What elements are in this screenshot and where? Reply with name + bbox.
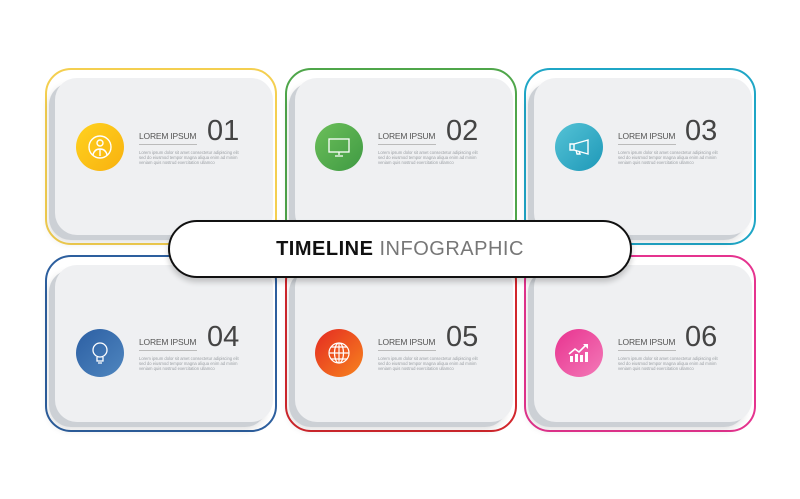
number 06: 06 (685, 321, 717, 353)
text 05: Lorem ipsum dolor sit amet consectetur adipiscing elit sed do eiusmod tempor magna aliqua enim ad minim veniam quis nostrud exercitation ullamco (378, 356, 478, 371)
panel: 03 outline (524, 68, 756, 245)
text 03: Lorem ipsum dolor sit amet consectetur adipiscing elit sed do eiusmod tempor magna aliqua enim ad minim veniam quis nostrud exercitation ullamco (618, 150, 718, 165)
number 03: 03 (685, 115, 717, 147)
heading 05: LOREM IPSUM (378, 337, 435, 347)
panel: 04 card (55, 265, 273, 422)
text 06: Lorem ipsum dolor sit amet consectetur adipiscing elit sed do eiusmod tempor magna aliqua enim ad minim veniam quis nostrud exercitation ullamco (618, 356, 718, 371)
heading 03: LOREM IPSUM (618, 131, 675, 141)
number 02: 02 (446, 115, 478, 147)
icon: megaphone (555, 123, 603, 171)
icon: globe (315, 329, 363, 377)
icon: bulb (76, 329, 124, 377)
icon: person (76, 123, 124, 171)
icon: monitor (315, 123, 363, 171)
panel: 05 outline (285, 255, 517, 432)
panel: 06 outline (524, 255, 756, 432)
heading 04: LOREM IPSUM (139, 337, 196, 347)
panel: 02 outline (285, 68, 517, 245)
panel: 05 card (295, 265, 513, 422)
heading 06: LOREM IPSUM (618, 337, 675, 347)
number 01: 01 (207, 115, 239, 147)
panel: 03 card (534, 78, 752, 235)
title pill (168, 220, 632, 278)
heading 01: LOREM IPSUM (139, 131, 196, 141)
text 01: Lorem ipsum dolor sit amet consectetur adipiscing elit sed do eiusmod tempor magna aliqua enim ad minim veniam quis nostrud exercitation ullamco (139, 150, 239, 165)
number 04: 04 (207, 321, 239, 353)
text 04: Lorem ipsum dolor sit amet consectetur adipiscing elit sed do eiusmod tempor magna aliqua enim ad minim veniam quis nostrud exercitation ullamco (139, 356, 239, 371)
number 05: 05 (446, 321, 478, 353)
title pill: TIMELINE INFOGRAPHIC (276, 238, 524, 260)
panel: 01 card (55, 78, 273, 235)
panel: 01 outline (45, 68, 277, 245)
icon: growth chart (555, 329, 603, 377)
heading 02: LOREM IPSUM (378, 131, 435, 141)
panel: 02 card (295, 78, 513, 235)
text 02: Lorem ipsum dolor sit amet consectetur adipiscing elit sed do eiusmod tempor magna aliqua enim ad minim veniam quis nostrud exercitation ullamco (378, 150, 478, 165)
panel: 04 outline (45, 255, 277, 432)
panel: 06 card (534, 265, 752, 422)
